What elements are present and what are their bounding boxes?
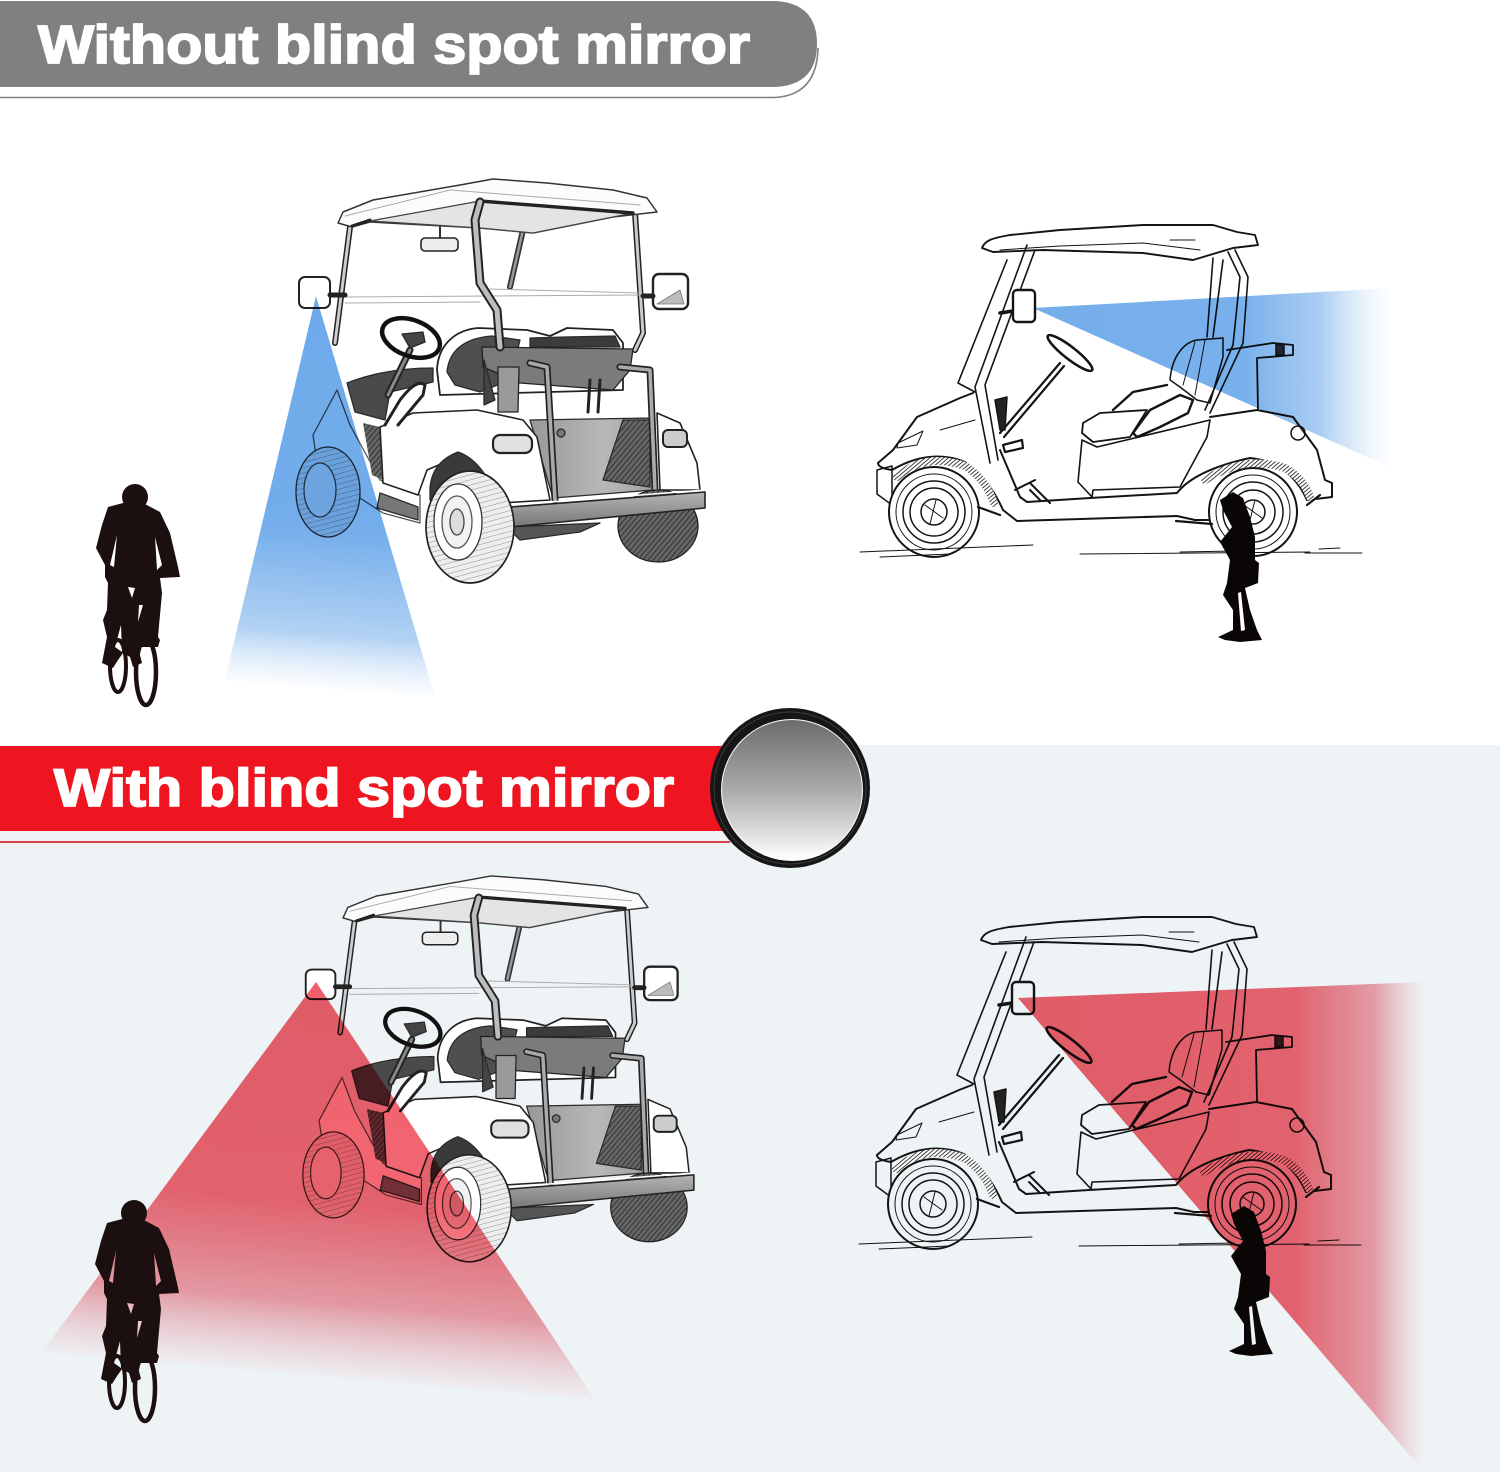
illustration: side view golf cart: [860, 225, 1362, 557]
silhouette: pedestrian in view: [1229, 1206, 1273, 1356]
silhouette: cyclist outside the view: [96, 484, 180, 705]
illustration: rear view golf cart: [303, 876, 694, 1262]
silhouette: cyclist in view: [95, 1200, 179, 1421]
panel: with mirror background: [0, 745, 1500, 1472]
wide red view cone, side view: [1018, 982, 1424, 1472]
illustration: rear view golf cart: [296, 179, 705, 583]
heading banner: without blind spot mirror: [0, 1, 818, 98]
silhouette: pedestrian outside the view: [1218, 492, 1262, 642]
panel: with blind spot mirror: [0, 708, 1424, 1472]
heading banner: with blind spot mirror: [0, 746, 730, 843]
narrow blue view cone, rear view: [225, 296, 435, 697]
narrow blue view cone, side view: [1033, 288, 1392, 468]
heading banner: with blind spot mirror: With blind spot mirror: [54, 759, 674, 818]
icon: round blind spot mirror: [710, 708, 870, 868]
illustration: side view golf cart: [859, 917, 1361, 1249]
wide red view cone, rear view: [42, 982, 595, 1400]
panel: without blind spot mirror: [0, 1, 1392, 705]
heading banner: without blind spot mirror: Without blind spot mirror: [38, 15, 750, 75]
